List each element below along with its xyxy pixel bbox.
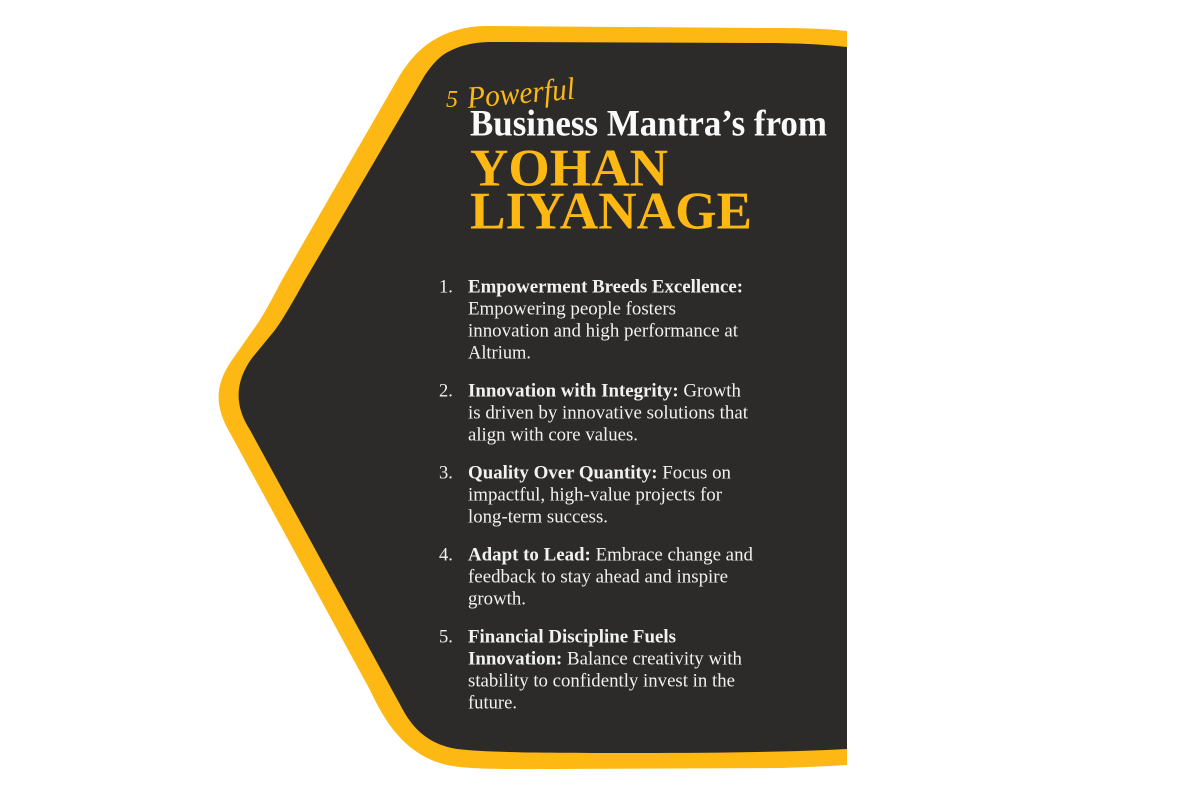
heading: Business Mantra's from: Business Mantra’s from <box>470 104 827 144</box>
heading: name: YOHAN <box>470 140 668 198</box>
mantra 2: 2. <box>439 382 453 402</box>
mantra 5: Innovation: Balance creativity with <box>468 650 742 670</box>
mantra 3: long-term success. <box>468 508 608 528</box>
heading: name <box>470 140 752 240</box>
script subtitle: 5 <box>446 87 458 113</box>
mantra 4: growth. <box>468 590 526 610</box>
mantra 4: feedback to stay ahead and inspire <box>468 568 728 588</box>
mantra 2: is driven by innovative solutions that <box>468 404 749 424</box>
mantra 1: Empowering people fosters <box>468 300 676 320</box>
mantra 1 <box>439 278 743 364</box>
mantra 3 <box>439 464 731 528</box>
mantra 5: Financial Discipline Fuels <box>468 628 676 648</box>
mantra 1: Altrium. <box>468 344 531 364</box>
mantra 2: Innovation with Integrity: Growth <box>468 382 741 402</box>
mantra list <box>439 278 754 714</box>
mantra 5: 5. <box>439 628 453 648</box>
mantra 2 <box>439 382 749 446</box>
panel: yellow border shape <box>219 26 847 769</box>
mantra 3: Quality Over Quantity: Focus on <box>468 464 731 484</box>
mantra 3: 3. <box>439 464 453 484</box>
mantra 4: Adapt to Lead: Embrace change and <box>468 546 754 566</box>
panel: dark background shape <box>239 42 847 753</box>
mantra 1: 1. <box>439 278 453 298</box>
mantra 1: innovation and high performance at <box>468 322 739 342</box>
mantra 3: impactful, high-value projects for <box>468 486 722 506</box>
mantra 4: 4. <box>439 546 453 566</box>
mantra 5: future. <box>468 694 517 714</box>
mantra 5 <box>439 628 742 714</box>
mantra 1: Empowerment Breeds Excellence: <box>468 278 743 298</box>
script subtitle: Powerful <box>465 71 576 115</box>
heading: name: LIYANAGE <box>470 182 752 240</box>
mantra 2: align with core values. <box>468 426 638 446</box>
mantra 4 <box>439 546 754 610</box>
mantra 5: stability to confidently invest in the <box>468 672 735 692</box>
